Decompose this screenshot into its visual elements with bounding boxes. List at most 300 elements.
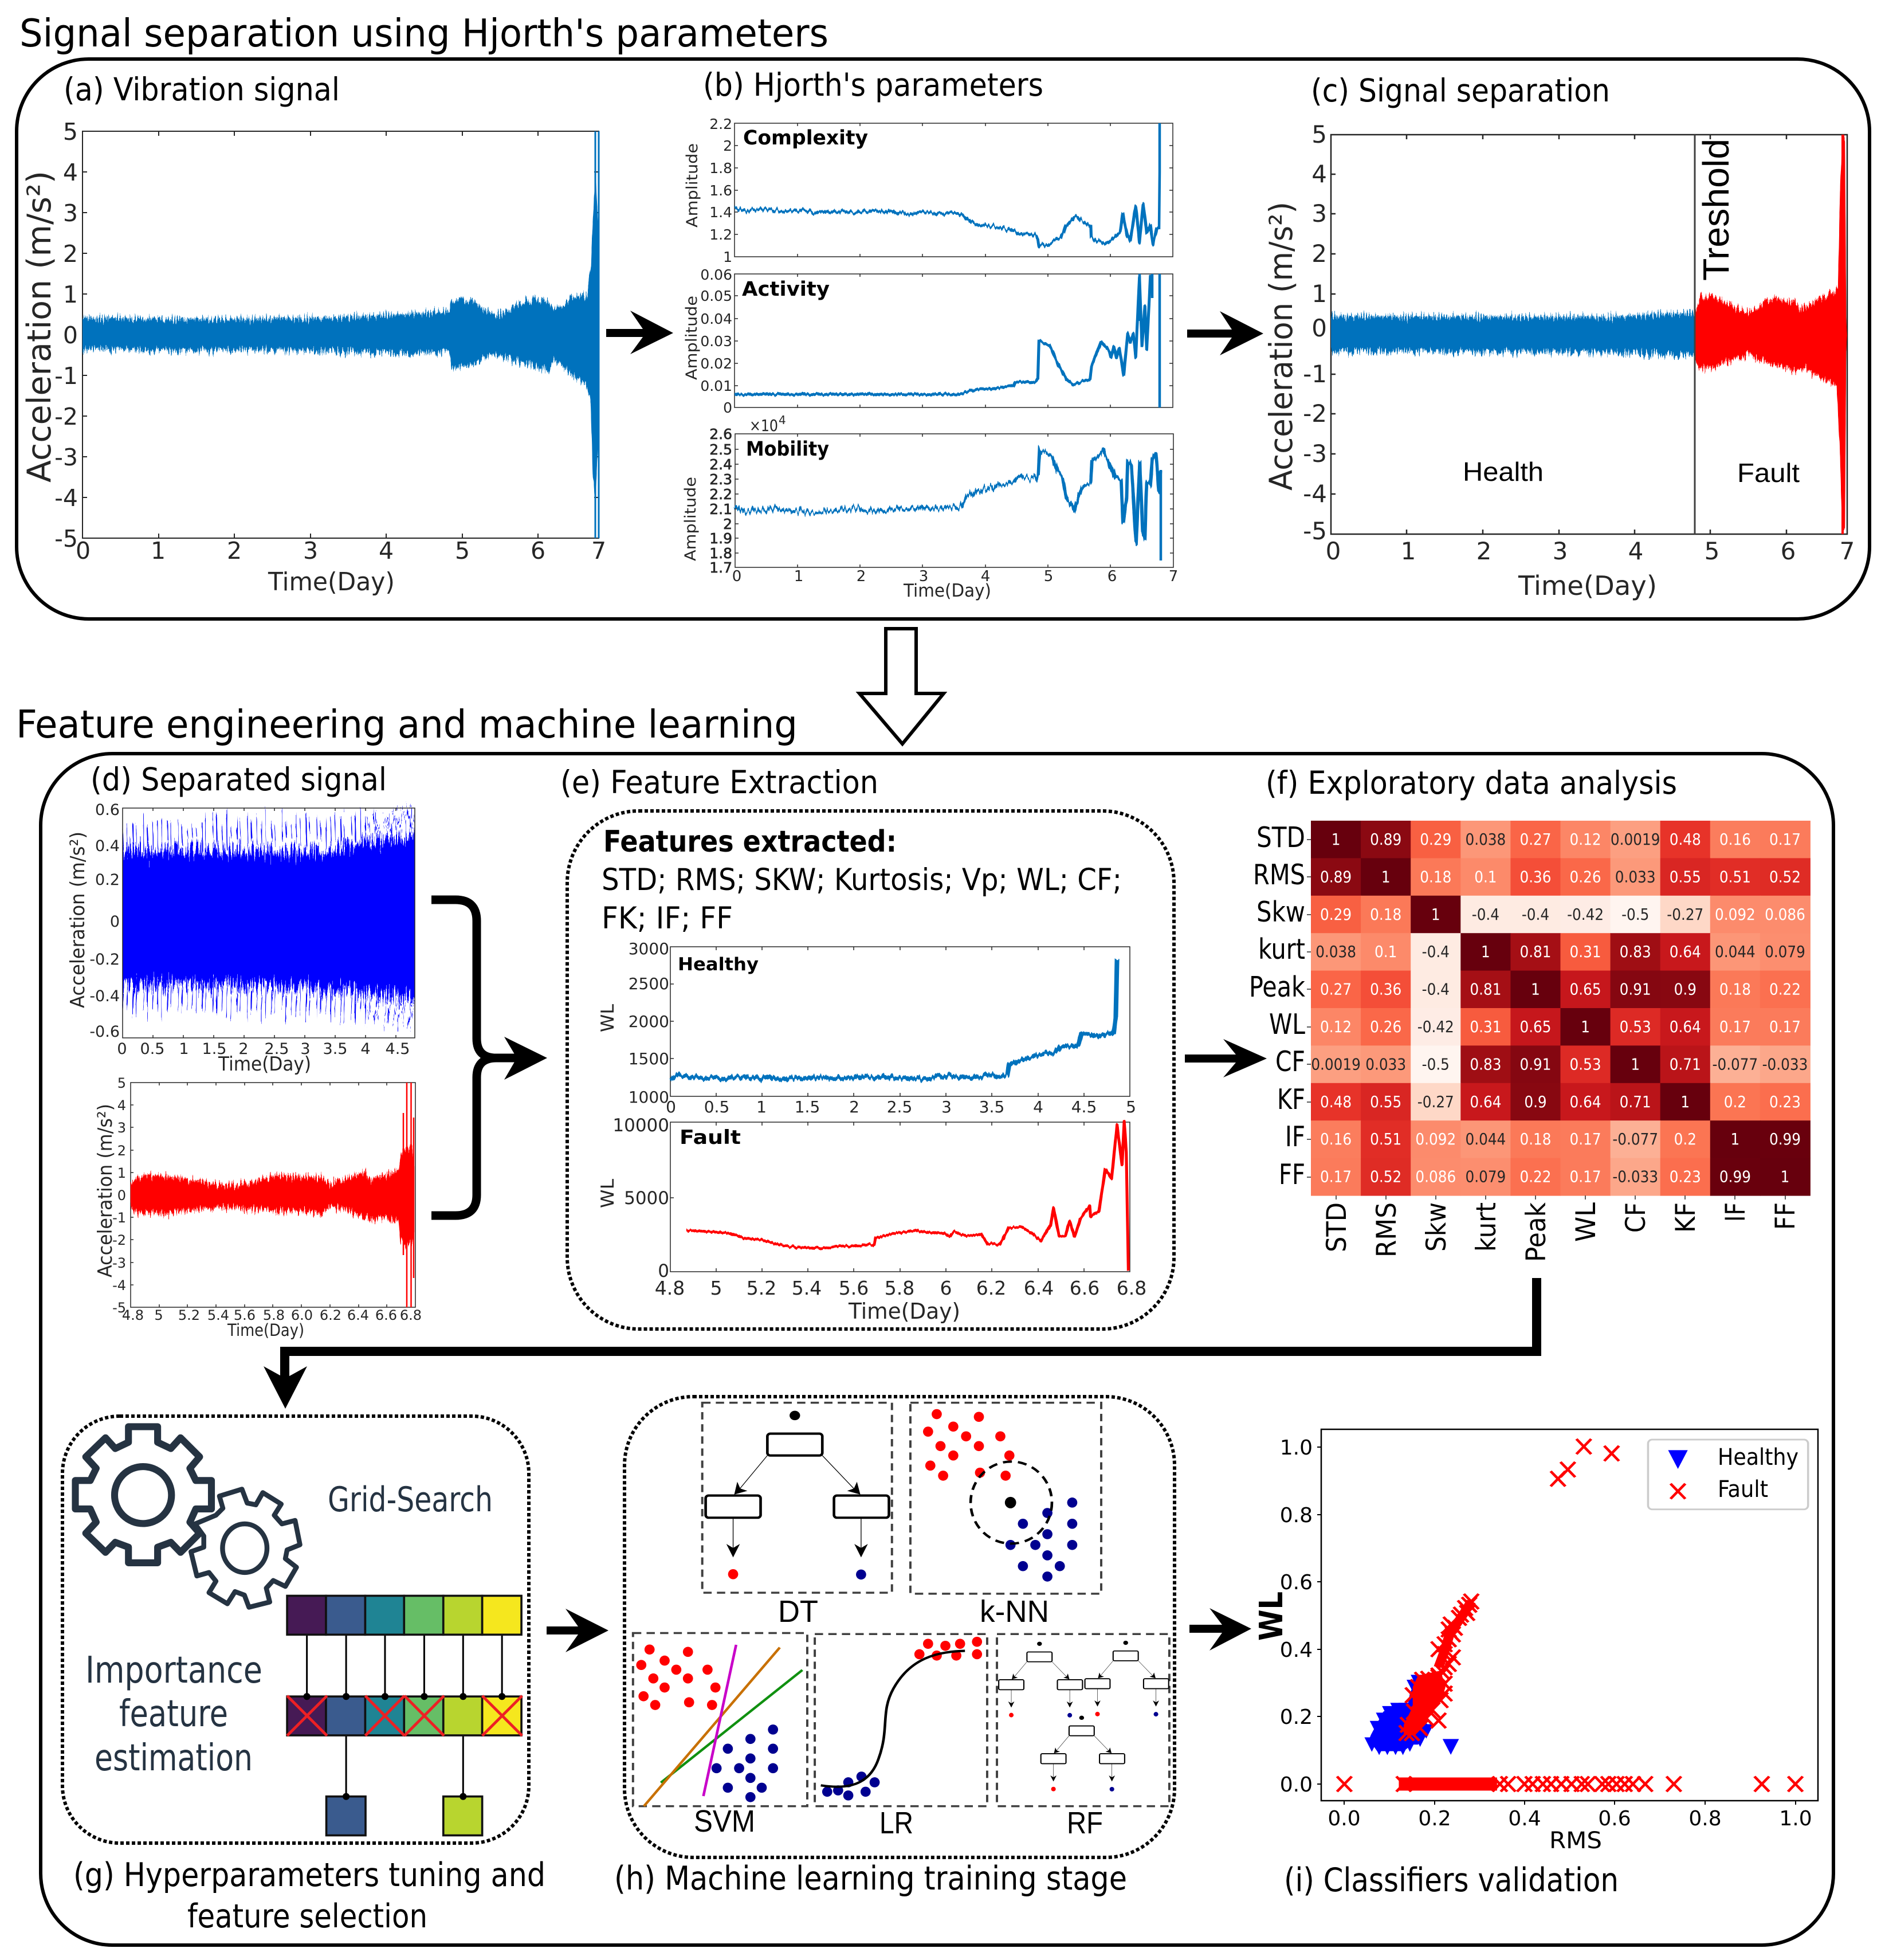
chart: mobility: 2.4 bbox=[709, 456, 732, 473]
chart: vibration signal: 5 bbox=[455, 537, 470, 565]
heatmap cells: 0.9 bbox=[1524, 1093, 1547, 1111]
heatmap cells: 0.18 bbox=[1519, 1130, 1552, 1148]
chart: signal separation with threshold: 1 bbox=[1311, 280, 1327, 308]
chart: classifiers validation scatter: 1.0 bbox=[1280, 1436, 1313, 1460]
chart: separated healthy signal: 0 bbox=[117, 1040, 127, 1058]
heatmap cells: 0.18 bbox=[1719, 981, 1751, 999]
heatmap cells: 0.71 bbox=[1620, 1093, 1651, 1111]
chart: separated healthy signal: 2 bbox=[238, 1040, 249, 1058]
heatmap cells: 0.16 bbox=[1719, 830, 1751, 849]
chart: classifiers validation scatter: WL bbox=[1253, 1591, 1290, 1641]
chart: separated fault signal: 6.4 bbox=[347, 1307, 369, 1323]
fault signal trace bbox=[1695, 140, 1847, 529]
heatmap cells: 1 bbox=[1332, 830, 1340, 849]
chart: separated fault signal: 6.2 bbox=[320, 1307, 341, 1323]
heatmap column labels: kurt bbox=[1471, 1202, 1502, 1252]
chart: separated fault signal: -2 bbox=[112, 1232, 126, 1248]
heatmap cells: 0.29 bbox=[1320, 905, 1352, 924]
heatmap cells: 0.22 bbox=[1769, 981, 1801, 999]
chart: mobility: 4 bbox=[981, 568, 990, 585]
heatmap cells: 0.51 bbox=[1719, 868, 1751, 886]
legend bbox=[1648, 1440, 1808, 1510]
heatmap cells: 0.81 bbox=[1470, 981, 1501, 999]
heatmap cells: 0.36 bbox=[1370, 981, 1401, 999]
chart: vibration signal: 1 bbox=[63, 281, 78, 308]
chart: complexity: Complexity bbox=[743, 127, 868, 150]
chart: complexity: 1 bbox=[723, 249, 732, 265]
arrow: brace joining separated signals bbox=[431, 900, 547, 1216]
chart: vibration signal: -3 bbox=[54, 444, 78, 471]
classifier: logistic regression bbox=[815, 1634, 987, 1806]
text block: features extracted: STD; RMS; SKW; Kurtosis; Vp; WL; CF; bbox=[602, 863, 1122, 897]
chart: WL fault: 6.8 bbox=[1117, 1277, 1146, 1299]
classifier: random forest bbox=[997, 1634, 1169, 1806]
panel heading: (a) vibration signal: (a) Vibration signal bbox=[64, 71, 340, 108]
chart: activity: Amplitude bbox=[683, 296, 701, 380]
chart: signal separation with threshold: 3 bbox=[1553, 537, 1568, 565]
chart: WL healthy: 1000 bbox=[629, 1088, 669, 1107]
icon: gears bbox=[76, 1426, 300, 1607]
chart: classifiers validation scatter: 0.2 bbox=[1280, 1706, 1313, 1729]
chart: separated healthy signal: 0.2 bbox=[95, 871, 120, 889]
chart: activity: 0.02 bbox=[700, 355, 732, 372]
heatmap row labels: CF bbox=[1275, 1045, 1305, 1078]
chart: signal separation with threshold: 1 bbox=[1401, 537, 1416, 565]
chart: WL fault: 5.2 bbox=[747, 1277, 776, 1299]
panel: feature extraction box bbox=[567, 811, 1174, 1329]
heatmap column labels: Skw bbox=[1421, 1202, 1452, 1252]
diagram: feature selection bars bbox=[287, 1596, 522, 1836]
chart: WL fault: 5.4 bbox=[792, 1277, 822, 1299]
label: grid search: Grid-Search bbox=[328, 1480, 493, 1520]
label: classifier names: SVM bbox=[694, 1804, 755, 1839]
chart: complexity: 2.2 bbox=[709, 116, 732, 132]
chart: separated fault signal: 5.4 bbox=[207, 1307, 229, 1323]
heatmap row labels: IF bbox=[1285, 1120, 1305, 1153]
heatmap cells: -0.27 bbox=[1417, 1093, 1454, 1111]
heatmap cells: 0.1 bbox=[1375, 943, 1397, 961]
chart: mobility: 2 bbox=[857, 568, 866, 585]
chart: vibration signal: 4 bbox=[379, 537, 394, 565]
heatmap cells: 0.55 bbox=[1670, 868, 1701, 886]
chart: separated fault signal: 5 bbox=[117, 1075, 126, 1091]
chart: signal separation with threshold: 6 bbox=[1781, 537, 1796, 565]
chart: separated healthy signal: -0.4 bbox=[89, 987, 120, 1005]
chart: separated healthy signal: 1.5 bbox=[202, 1040, 226, 1058]
chart: WL healthy: 3000 bbox=[629, 939, 669, 958]
chart: signal separation with threshold: 5 bbox=[1311, 120, 1327, 148]
chart: signal separation with threshold: 7 bbox=[1840, 537, 1855, 565]
heatmap cells: 0.079 bbox=[1765, 943, 1805, 961]
heatmap cells: 0.71 bbox=[1670, 1055, 1701, 1073]
panel: signal separation frame bbox=[17, 59, 1870, 619]
chart: WL fault: WL bbox=[598, 1178, 618, 1208]
chart: vibration signal: 2 bbox=[63, 240, 78, 268]
chart: WL fault: 6 bbox=[940, 1277, 952, 1299]
heatmap cells: 0.83 bbox=[1470, 1055, 1501, 1073]
chart: WL fault: 6.4 bbox=[1024, 1277, 1054, 1299]
heatmap cells: 0.23 bbox=[1769, 1093, 1801, 1111]
chart: classifiers validation scatter: 0.4 bbox=[1280, 1638, 1313, 1662]
heatmap cells: 0.2 bbox=[1674, 1130, 1696, 1148]
panel heading: (c) signal separation: (c) Signal separation bbox=[1311, 72, 1610, 109]
label: classifier names: RF bbox=[1067, 1806, 1103, 1840]
title: feature engineering: Feature engineering and machine learning bbox=[16, 702, 798, 747]
chart: separated healthy signal: -0.2 bbox=[89, 951, 120, 969]
chart: WL healthy: 2.5 bbox=[887, 1097, 912, 1116]
chart: WL fault: Time(Day) bbox=[848, 1299, 960, 1324]
panel: hyperparameter tuning box bbox=[62, 1416, 529, 1843]
arrow: training to validation bbox=[1189, 1608, 1251, 1651]
heatmap cells: 0.044 bbox=[1465, 1130, 1506, 1148]
heatmap cells: 0.0019 bbox=[1611, 830, 1660, 849]
chart: separated fault signal: 0 bbox=[117, 1187, 126, 1204]
heatmap cells: 0.27 bbox=[1320, 981, 1352, 999]
text block: features extracted bbox=[602, 825, 1122, 936]
chart: separated healthy signal: 2.5 bbox=[265, 1040, 289, 1058]
chart: WL healthy: 5 bbox=[1126, 1097, 1136, 1116]
heatmap cells: 0.53 bbox=[1620, 1018, 1651, 1036]
chart: WL fault: Fault bbox=[680, 1126, 741, 1149]
heatmap cells: 0.51 bbox=[1370, 1130, 1401, 1148]
heatmap cells: 1 bbox=[1680, 1093, 1690, 1111]
chart: separated healthy signal: 0.4 bbox=[95, 837, 120, 855]
heatmap cells: 0.044 bbox=[1715, 943, 1756, 961]
arrow: tuning to training bbox=[547, 1609, 608, 1652]
chart: separated healthy signal: Acceleration (m/s²) bbox=[66, 832, 89, 1008]
chart: WL healthy: 1.5 bbox=[795, 1097, 820, 1116]
chart: signal separation with threshold: 2 bbox=[1311, 240, 1327, 268]
chart: vibration signal: 1 bbox=[151, 537, 166, 565]
heatmap cells: 0.2 bbox=[1724, 1093, 1746, 1111]
heatmap cells: 0.55 bbox=[1370, 1093, 1401, 1111]
heatmap cells: 0.17 bbox=[1570, 1130, 1601, 1148]
chart: WL fault: 10000 bbox=[612, 1115, 669, 1136]
heatmap cells: -0.5 bbox=[1621, 905, 1649, 924]
heatmap cells: 1 bbox=[1781, 1168, 1789, 1186]
chart: WL fault: 5.6 bbox=[839, 1277, 869, 1299]
heatmap cells: 0.48 bbox=[1670, 830, 1701, 849]
chart: WL healthy: 1 bbox=[756, 1097, 767, 1116]
heatmap cells: 0.033 bbox=[1365, 1055, 1406, 1073]
heatmap cells: 1 bbox=[1431, 905, 1440, 924]
chart: signal separation with threshold: Fault bbox=[1737, 458, 1800, 488]
heatmap cells: 0.092 bbox=[1715, 905, 1756, 924]
arrow: exploratory analysis to hyperparameter tuning bbox=[264, 1278, 1537, 1409]
chart: classifiers validation scatter: 0.0 bbox=[1328, 1807, 1361, 1830]
heatmap cells: 0.99 bbox=[1769, 1130, 1801, 1148]
heatmap cells: 0.31 bbox=[1470, 1018, 1501, 1036]
arrow: vibration signal to Hjorth parameters bbox=[606, 311, 673, 354]
heatmap cells: 0.99 bbox=[1719, 1168, 1751, 1186]
heatmap cells: 0.64 bbox=[1670, 943, 1701, 961]
heatmap cells: 0.038 bbox=[1465, 830, 1506, 849]
chart: separated fault signal: 5.6 bbox=[234, 1307, 256, 1323]
chart: mobility: 2.3 bbox=[709, 471, 732, 488]
chart: vibration signal: 5 bbox=[63, 118, 78, 146]
chart: activity: 0.04 bbox=[700, 311, 732, 327]
mobility curve bbox=[735, 448, 1161, 544]
heatmap cells: 0.17 bbox=[1320, 1168, 1352, 1186]
chart: signal separation with threshold: -2 bbox=[1303, 399, 1327, 428]
chart: classifiers validation scatter: 0.4 bbox=[1508, 1807, 1541, 1830]
classifier: decision tree bbox=[702, 1403, 892, 1593]
label: importance feature estimation: feature bbox=[119, 1693, 228, 1735]
chart: complexity: 1.2 bbox=[709, 226, 732, 243]
chart: vibration signal: 0 bbox=[76, 537, 91, 565]
chart: vibration signal: 3 bbox=[63, 199, 78, 227]
chart: WL fault: 6.2 bbox=[976, 1277, 1006, 1299]
chart: vibration signal: 0 bbox=[63, 322, 78, 349]
chart: separated fault signal: -5 bbox=[112, 1300, 126, 1316]
chart: classifiers validation scatter: 0.6 bbox=[1280, 1571, 1313, 1594]
chart: classifiers validation scatter: Fault bbox=[1718, 1476, 1768, 1503]
chart: signal separation with threshold: -3 bbox=[1303, 440, 1327, 468]
heatmap row labels: RMS bbox=[1253, 859, 1305, 891]
heatmap column labels: KF bbox=[1670, 1202, 1702, 1233]
chart: WL fault: 5000 bbox=[624, 1188, 669, 1209]
chart: WL fault: 4.8 bbox=[655, 1277, 685, 1299]
chart: separated healthy signal: 4 bbox=[360, 1040, 371, 1058]
chart: separated fault signal: -1 bbox=[112, 1210, 126, 1226]
chart: mobility: 6 bbox=[1108, 568, 1117, 585]
panel heading: (b) Hjorth's parameters: (b) Hjorth's parameters bbox=[703, 66, 1043, 103]
heatmap cells: 0.91 bbox=[1620, 981, 1651, 999]
chart: vibration signal: 7 bbox=[591, 537, 606, 565]
heatmap cells: 0.26 bbox=[1570, 868, 1601, 886]
arrow: hollow down arrow between sections bbox=[859, 629, 944, 744]
heatmap cells: 0.12 bbox=[1320, 1018, 1352, 1036]
label: classifier names: LR bbox=[879, 1806, 913, 1840]
heatmap cells: -0.5 bbox=[1422, 1055, 1450, 1073]
chart: WL healthy: 2000 bbox=[629, 1012, 669, 1031]
chart: WL healthy: 3.5 bbox=[979, 1097, 1004, 1116]
bar: feature elimination bbox=[287, 1696, 521, 1735]
chart: WL healthy: 0 bbox=[666, 1097, 676, 1116]
heatmap cells: 0.12 bbox=[1570, 830, 1601, 849]
chart: mobility: ×10 bbox=[749, 416, 778, 435]
chart: vibration signal: 4 bbox=[63, 159, 78, 186]
heatmap cells: 0.17 bbox=[1769, 1018, 1801, 1036]
chart: activity bbox=[683, 266, 1173, 416]
heatmap cells: 0.27 bbox=[1519, 830, 1552, 849]
chart: separated fault signal: 4.8 bbox=[122, 1307, 144, 1323]
heatmap cells: 0.079 bbox=[1465, 1168, 1506, 1186]
chart: separated fault signal: 1 bbox=[117, 1165, 126, 1181]
chart: separated fault signal: 6.6 bbox=[375, 1307, 397, 1323]
heatmap column labels: STD bbox=[1321, 1202, 1353, 1252]
chart: mobility: 2 bbox=[723, 516, 732, 532]
chart: mobility: 7 bbox=[1169, 568, 1178, 585]
chart: signal separation with threshold: -1 bbox=[1303, 360, 1327, 388]
chart: separated healthy signal: 0.5 bbox=[140, 1040, 164, 1058]
chart: WL healthy: 2 bbox=[849, 1097, 859, 1116]
classifier: SVM bbox=[633, 1633, 807, 1806]
heatmap cells: 0.1 bbox=[1474, 868, 1497, 886]
heatmap cells: 0.48 bbox=[1320, 1093, 1352, 1111]
chart: separated fault signal bbox=[94, 1075, 422, 1340]
heatmap cells: -0.077 bbox=[1612, 1130, 1658, 1148]
chart: signal separation with threshold: 5 bbox=[1705, 537, 1719, 565]
heatmap cells: 0.23 bbox=[1670, 1168, 1701, 1186]
heatmap cells: 0.64 bbox=[1570, 1093, 1601, 1111]
heatmap cells: 0.31 bbox=[1570, 943, 1601, 961]
chart: classifiers validation scatter: 0.2 bbox=[1418, 1807, 1451, 1830]
chart: WL fault: 5.8 bbox=[885, 1277, 914, 1299]
chart: separated healthy signal: 3.5 bbox=[323, 1040, 347, 1058]
chart: complexity bbox=[684, 116, 1173, 265]
chart: separated fault signal: 5 bbox=[154, 1307, 163, 1323]
chart: separated fault signal: Time(Day) bbox=[227, 1320, 304, 1340]
caption: (g) hyperparameters tuning: (g) Hyperparameters tuning and bbox=[73, 1856, 545, 1894]
heatmap column labels: FF bbox=[1770, 1202, 1801, 1230]
chart: WL fault: 5 bbox=[710, 1277, 722, 1299]
panel heading: (e) feature extraction: (e) Feature Extraction bbox=[560, 764, 878, 801]
heatmap cells: 0.086 bbox=[1765, 905, 1805, 924]
chart: mobility: 2.6 bbox=[709, 426, 732, 442]
chart: correlation heatmap bbox=[1249, 821, 1811, 1262]
chart: separated healthy signal: 1 bbox=[179, 1040, 189, 1058]
panel: feature engineering frame bbox=[41, 754, 1833, 1945]
chart: separated healthy signal bbox=[66, 801, 415, 1076]
heatmap cells: -0.4 bbox=[1472, 905, 1499, 924]
chart: vibration signal bbox=[21, 118, 606, 597]
chart: separated healthy signal: 0.6 bbox=[95, 801, 120, 819]
chart: classifiers validation scatter: 0.8 bbox=[1688, 1807, 1722, 1830]
chart: WL fault: 0 bbox=[658, 1261, 669, 1281]
heatmap cells: 0.0019 bbox=[1311, 1055, 1361, 1073]
chart: activity: 0 bbox=[723, 399, 732, 416]
caption: (g) hyperparameters tuning bbox=[73, 1856, 545, 1935]
heatmap cells: 0.086 bbox=[1415, 1168, 1456, 1186]
chart: classifiers validation scatter bbox=[1253, 1429, 1818, 1854]
heatmap cells: -0.27 bbox=[1667, 905, 1703, 924]
chart: vibration signal: -4 bbox=[54, 484, 78, 512]
heatmap cells: -0.4 bbox=[1422, 981, 1450, 999]
heatmap cells bbox=[1311, 821, 1811, 1196]
chart: WL healthy: 0.5 bbox=[704, 1097, 729, 1116]
arrow: Hjorth parameters to signal separation bbox=[1187, 311, 1263, 355]
chart: mobility: 2.5 bbox=[709, 441, 732, 458]
heatmap cells: 0.17 bbox=[1570, 1168, 1601, 1186]
chart: WL healthy: 1500 bbox=[629, 1049, 669, 1068]
panel heading: (f) exploratory data analysis: (f) Exploratory data analysis bbox=[1266, 765, 1677, 801]
heatmap cells: 0.038 bbox=[1315, 943, 1356, 961]
chart: separated fault signal: Acceleration (m/s²) bbox=[94, 1104, 117, 1277]
chart: vibration signal: 6 bbox=[531, 537, 545, 565]
heatmap cells: 1 bbox=[1481, 943, 1490, 961]
heatmap cells: 0.52 bbox=[1370, 1168, 1401, 1186]
chart: classifiers validation scatter: Healthy bbox=[1718, 1444, 1798, 1471]
chart: mobility: 2.1 bbox=[709, 501, 732, 518]
heatmap cells: 0.17 bbox=[1719, 1018, 1751, 1036]
caption: (g) hyperparameters tuning: feature selection bbox=[187, 1898, 427, 1935]
chart: activity: 0.05 bbox=[700, 288, 732, 304]
chart: complexity: 1.6 bbox=[709, 182, 732, 199]
chart: WL fault bbox=[598, 1115, 1146, 1324]
heatmap cells: 0.65 bbox=[1519, 1018, 1552, 1036]
chart: classifiers validation scatter: 0.0 bbox=[1280, 1773, 1313, 1797]
caption: (h) machine learning training stage: (h) Machine learning training stage bbox=[614, 1860, 1127, 1898]
label: classifier names: k-NN bbox=[980, 1594, 1049, 1629]
label: classifier names bbox=[694, 1594, 1103, 1840]
caption: (i) classifiers validation: (i) Classifiers validation bbox=[1284, 1861, 1619, 1899]
fault signal trace bbox=[131, 1147, 414, 1244]
heatmap cells: 0.22 bbox=[1519, 1168, 1552, 1186]
heatmap cells: 0.18 bbox=[1420, 868, 1451, 886]
heatmap cells: 0.64 bbox=[1670, 1018, 1701, 1036]
heatmap cells: 0.18 bbox=[1370, 905, 1401, 924]
chart: separated healthy signal: Time(Day) bbox=[218, 1053, 311, 1076]
text block: features extracted: Features extracted: bbox=[603, 825, 897, 859]
heatmap row labels: Peak bbox=[1249, 971, 1305, 1003]
chart: mobility bbox=[682, 413, 1178, 601]
heatmap cells: 1 bbox=[1631, 1055, 1640, 1073]
heatmap cells: -0.4 bbox=[1422, 943, 1450, 961]
heatmap cells: 0.16 bbox=[1320, 1130, 1352, 1148]
arrow: feature extraction to exploratory analysis bbox=[1185, 1039, 1267, 1077]
chart: separated fault signal: 5.2 bbox=[178, 1307, 200, 1323]
heatmap cells: 0.29 bbox=[1420, 830, 1451, 849]
chart: WL healthy: Healthy bbox=[678, 954, 759, 975]
chart: activity: 0.03 bbox=[700, 333, 732, 350]
chart: classifiers validation scatter: RMS bbox=[1549, 1828, 1602, 1854]
chart: signal separation with threshold: Health bbox=[1463, 457, 1544, 487]
chart: separated fault signal: -4 bbox=[112, 1277, 126, 1293]
chart: signal separation with threshold bbox=[1263, 120, 1855, 601]
activity curve bbox=[735, 277, 1152, 394]
chart: signal separation with threshold: Time(Day) bbox=[1518, 570, 1657, 601]
heatmap row labels: STD bbox=[1256, 821, 1305, 854]
signal trace bbox=[83, 169, 599, 503]
chart: WL healthy: 4 bbox=[1033, 1097, 1043, 1116]
heatmap row labels: Skw bbox=[1256, 896, 1305, 928]
chart: separated healthy signal: 4.5 bbox=[386, 1040, 410, 1058]
healthy signal trace bbox=[1331, 312, 1695, 356]
chart: WL healthy: WL bbox=[598, 1003, 618, 1032]
chart: separated healthy signal: 0 bbox=[110, 913, 120, 931]
chart: WL fault: 6.6 bbox=[1070, 1277, 1099, 1299]
chart: signal separation with threshold: -4 bbox=[1303, 480, 1327, 508]
chart: complexity: 1.8 bbox=[709, 160, 732, 177]
heatmap row labels: KF bbox=[1277, 1083, 1305, 1116]
bar: selected features bbox=[327, 1797, 482, 1836]
text block: features extracted: FK; IF; FF bbox=[602, 901, 733, 936]
chart: separated fault signal: 2 bbox=[117, 1143, 126, 1159]
chart: signal separation with threshold: 0 bbox=[1326, 537, 1341, 565]
chart: mobility: 1.9 bbox=[709, 530, 732, 547]
chart: classifiers validation scatter: 0.6 bbox=[1598, 1807, 1631, 1830]
chart: mobility: 1.8 bbox=[709, 545, 732, 562]
chart: separated healthy signal: 3 bbox=[300, 1040, 311, 1058]
complexity curve bbox=[735, 203, 1159, 245]
heatmap cells: 0.26 bbox=[1370, 1018, 1401, 1036]
label: importance feature estimation: Importance bbox=[85, 1649, 262, 1692]
heatmap cells: 0.36 bbox=[1519, 868, 1552, 886]
chart: separated fault signal: 5.8 bbox=[263, 1307, 285, 1323]
chart: signal separation with threshold: 4 bbox=[1628, 537, 1643, 565]
heatmap cells: 0.17 bbox=[1769, 830, 1801, 849]
chart: signal separation with threshold: Acceleration (m/s²) bbox=[1263, 202, 1299, 491]
heatmap cells: 0.64 bbox=[1470, 1093, 1501, 1111]
chart: signal separation with threshold: 0 bbox=[1311, 314, 1327, 342]
chart: mobility: 1.7 bbox=[709, 559, 732, 576]
label: importance feature estimation bbox=[85, 1649, 262, 1779]
scatter points bbox=[1337, 1439, 1808, 1792]
label: importance feature estimation: estimation bbox=[95, 1737, 253, 1779]
healthy signal trace bbox=[123, 817, 415, 1016]
chart: WL healthy: 2500 bbox=[629, 974, 669, 993]
